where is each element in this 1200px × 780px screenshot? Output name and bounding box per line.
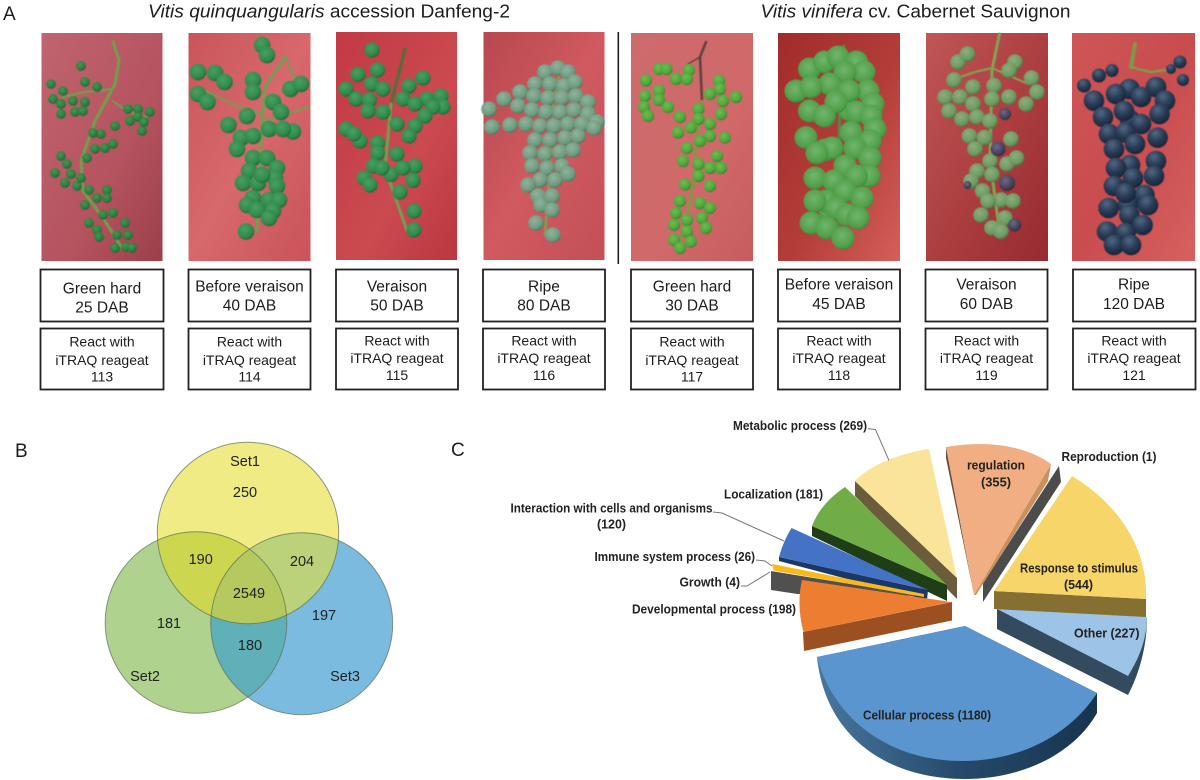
Venn labels: 190 [189, 552, 213, 568]
Venn labels: 180 [238, 638, 262, 654]
stage box: Veraison 60 DAB [926, 270, 1048, 322]
leader line: Interaction [713, 512, 784, 541]
reagent box 118 [778, 328, 900, 390]
reagent box 117: React with [659, 334, 725, 350]
Venn labels: 2549 [233, 586, 265, 602]
stage box: Green hard 25 DAB: Green hard [63, 280, 141, 298]
reagent box 118: React with [806, 332, 872, 348]
slice: Localization [812, 487, 947, 601]
reagent box 116 [483, 328, 605, 390]
slice: Other [997, 609, 1147, 695]
slice: Response to stimulus [994, 476, 1146, 617]
reagent box 113: React with [69, 334, 135, 350]
photo: V. quinquangularis ripe [481, 32, 605, 260]
reagent box 117: iTRAQ reageat [645, 352, 739, 368]
stage box: Veraison 60 DAB: 60 DAB [960, 296, 1013, 313]
photo: V. vinifera ripe [1072, 33, 1195, 261]
reagent box 118: 118 [828, 367, 850, 383]
Venn diagram [105, 442, 393, 715]
stage box: Ripe 80 DAB: 80 DAB [517, 298, 571, 314]
stage box: Before veraison 45 DAB: Before veraison [785, 276, 893, 294]
iTRAQ reagent boxes [40, 328, 1196, 390]
photo: V. vinifera before veraison [778, 33, 900, 261]
reagent box 115: iTRAQ reageat [350, 350, 444, 366]
pie labels: Localization (181) [724, 488, 823, 502]
reagent box 119: 119 [975, 367, 998, 383]
stage box: Before veraison 40 DAB [188, 270, 310, 322]
reagent box 114: React with [217, 334, 282, 350]
circle Set2 [105, 532, 287, 713]
reagent box 116: 116 [533, 367, 555, 383]
Venn labels: 197 [312, 608, 336, 624]
stage label boxes [40, 270, 1196, 322]
panel label B: B [15, 441, 28, 462]
stage box: Veraison 50 DAB: Veraison [367, 278, 427, 296]
stage box: Veraison 50 DAB: 50 DAB [370, 298, 424, 314]
stage box: Before veraison 40 DAB: 40 DAB [223, 298, 276, 314]
stage box: Green hard 25 DAB: 25 DAB [75, 300, 129, 316]
pie labels: (120) [597, 518, 626, 532]
slice: Cellular process [817, 626, 1097, 779]
reagent box 121 [1073, 328, 1196, 390]
Venn labels [130, 454, 360, 685]
pie labels: Cellular process (1180) [863, 708, 991, 722]
reagent box 119 [926, 328, 1048, 390]
reagent box 114: 114 [238, 368, 261, 384]
pie labels: Developmental process (198) [632, 602, 796, 616]
Venn labels: Set3 [330, 669, 360, 685]
heading: Vitis quinquangularis: Vitis quinquangularis accession Danfeng-2 [148, 2, 510, 22]
leader line: Metabolic [868, 429, 889, 461]
stage box: Green hard 30 DAB [631, 270, 753, 322]
stage box: Green hard 25 DAB [40, 270, 164, 322]
circle Set3 [211, 533, 393, 715]
stage box: Veraison 60 DAB: Veraison [956, 276, 1017, 294]
stage box: Ripe 120 DAB: Ripe [1118, 276, 1150, 294]
stage box: Before veraison 45 DAB: 45 DAB [812, 296, 866, 313]
pie labels: Other (227) [1074, 626, 1140, 640]
slice: Growth [771, 571, 924, 596]
panel label C: C [451, 440, 465, 461]
Venn labels: 204 [290, 554, 314, 570]
pie labels: Interaction with cells and organisms [510, 502, 713, 516]
stage box: Before veraison 40 DAB: Before veraison [195, 278, 304, 296]
pie labels: (544) [1064, 578, 1093, 592]
reagent box 121: React with [1101, 332, 1167, 348]
reagent box 121: 121 [1122, 367, 1146, 383]
pie labels: Metabolic process (269) [733, 419, 867, 433]
slice: regulation [946, 444, 1051, 595]
pie labels: (355) [981, 476, 1011, 490]
stage box: Ripe 120 DAB: 120 DAB [1103, 296, 1165, 313]
pie labels: Immune system process (26) [594, 550, 755, 564]
reagent box 113: 113 [91, 368, 113, 384]
photo: V. vinifera veraison [926, 33, 1048, 261]
stage box: Before veraison 45 DAB [778, 270, 900, 322]
slice: Immune system process [772, 564, 924, 597]
reagent box 119: React with [954, 332, 1019, 348]
slice: Interaction with cells and organisms [779, 528, 928, 600]
stage box: Ripe 80 DAB: Ripe [528, 278, 560, 296]
reagent box 114: iTRAQ reageat [203, 352, 296, 368]
stage box: Ripe 80 DAB [483, 270, 605, 322]
exploded 3D pie chart [510, 419, 1156, 779]
reagent box 117: 117 [681, 368, 703, 384]
reagent box 115: React with [364, 332, 430, 348]
photo: V. quinquangularis green hard [42, 33, 162, 261]
reagent box 115 [336, 328, 458, 390]
Venn labels: Set2 [130, 669, 160, 685]
reagent box 116: React with [511, 332, 577, 348]
slice: Developmental process [799, 580, 952, 651]
heading: Vitis vinifera: Vitis vinifera cv. Cabernet Sauvignon [760, 2, 1070, 22]
stage box: Green hard 30 DAB: Green hard [653, 278, 731, 296]
reagent box 114 [188, 328, 310, 390]
pie labels: regulation [967, 458, 1025, 472]
pie labels [510, 419, 1156, 722]
reagent box 115: 115 [386, 367, 408, 383]
stage box: Ripe 120 DAB [1073, 270, 1196, 322]
stage box: Green hard 30 DAB: 30 DAB [665, 298, 719, 314]
pie labels: Growth (4) [680, 576, 740, 590]
reagent box 113 [40, 328, 164, 390]
leader line: Growth [741, 572, 770, 586]
photo: V. quinquangularis veraison [336, 32, 457, 260]
Venn labels: 181 [157, 616, 181, 632]
Venn labels: 250 [233, 485, 257, 501]
pie labels: Response to stimulus [1020, 562, 1138, 576]
reagent box 118: iTRAQ reageat [792, 350, 886, 366]
photo: V. quinquangularis before veraison [188, 33, 310, 261]
slice: Metabolic process [855, 449, 957, 599]
reagent box 119: iTRAQ reageat [940, 350, 1033, 366]
photo: V. vinifera green hard [631, 33, 753, 261]
pie labels: Reproduction (1) [1062, 450, 1156, 464]
reagent box 121: iTRAQ reageat [1087, 350, 1181, 366]
reagent box 113: iTRAQ reageat [55, 352, 149, 368]
stage box: Veraison 50 DAB [336, 270, 458, 322]
slice: Reproduction [983, 466, 1061, 602]
leader line: Immune [756, 560, 772, 566]
divider between species [618, 32, 619, 264]
reagent box 117 [631, 328, 753, 390]
panel label A: A [3, 4, 16, 25]
Venn labels: Set1 [230, 454, 260, 470]
circle Set1 [157, 442, 339, 624]
reagent box 116: iTRAQ reageat [497, 350, 591, 366]
